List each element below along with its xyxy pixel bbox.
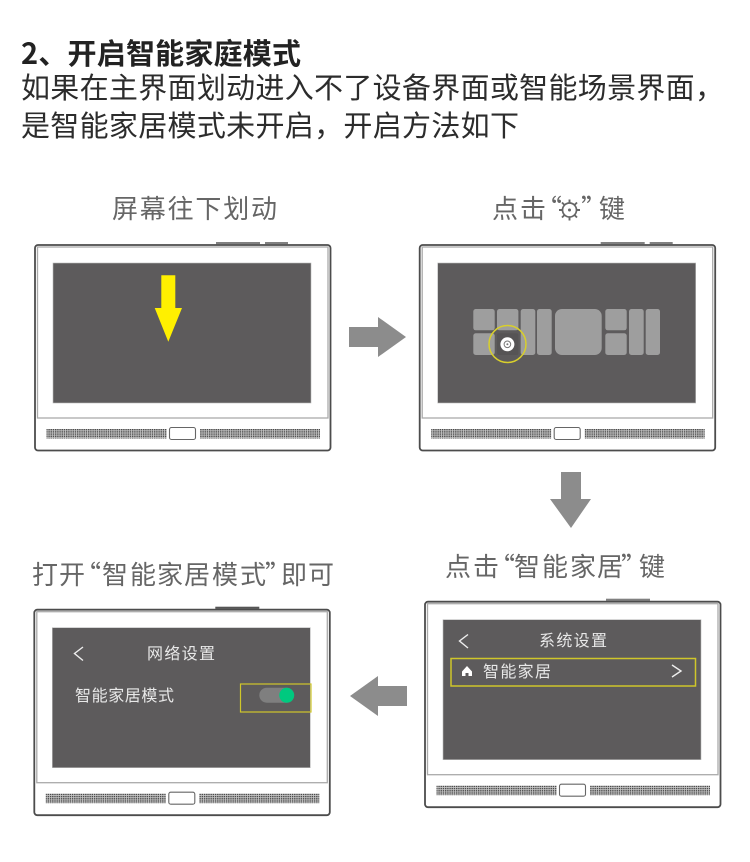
step 2 heading <box>492 189 625 226</box>
intro text: 如果在主界面划动进入不了设备界面或智能场景界面， <box>21 65 724 107</box>
system settings screen <box>451 627 696 686</box>
step 4 heading: 打开“智能家居模式”即可 <box>32 555 334 592</box>
icon: gear in heading <box>559 200 580 220</box>
step 2 heading: 键 <box>599 189 625 226</box>
arrow: left <box>350 676 407 716</box>
network settings screen: 智能家居模式 <box>75 682 174 706</box>
system settings screen: 智能家居 <box>483 658 551 682</box>
step 1 heading: 屏幕往下划动 <box>112 189 277 226</box>
intro text: 是智能家居模式未开启，开启方法如下 <box>21 103 519 145</box>
system settings screen: 系统设置 <box>539 627 607 651</box>
step 2 heading: ” <box>581 189 607 226</box>
arrow: right <box>349 317 406 357</box>
step 4 device <box>34 607 330 815</box>
toggle switch <box>259 688 294 703</box>
icon: yellow down arrow <box>155 275 182 342</box>
step 2 heading: 点击 <box>492 189 546 226</box>
icon: home <box>462 666 472 676</box>
step 3 device <box>425 599 720 807</box>
network settings screen <box>74 640 311 712</box>
app tiles <box>473 309 660 355</box>
step 1 device <box>35 242 330 450</box>
step 2 heading: “ <box>536 189 562 226</box>
icon: settings highlight <box>489 326 526 362</box>
arrow: down <box>550 472 591 528</box>
intro text <box>21 65 724 145</box>
step 2 device <box>420 242 715 450</box>
step 3 heading: 点击“智能家居”键 <box>445 547 665 584</box>
title: 2、开启智能家庭模式 <box>21 31 301 73</box>
network settings screen: 网络设置 <box>147 640 215 664</box>
